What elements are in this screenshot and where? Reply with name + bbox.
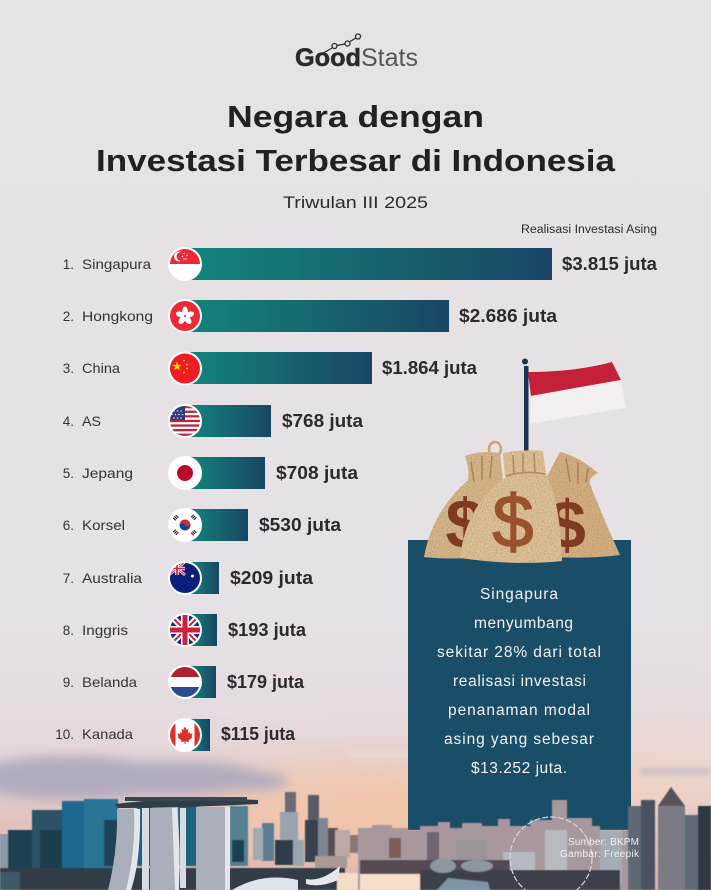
left towers: [0, 787, 711, 890]
ArtScience dome: [232, 878, 298, 890]
source credit: [560, 837, 640, 860]
right bag: $: [548, 487, 586, 563]
flag: China: [168, 352, 202, 386]
flag: Belanda: [168, 665, 202, 699]
values: $1.864 juta: [382, 358, 478, 378]
values: $209 juta: [230, 568, 314, 588]
country names: Inggris: [82, 622, 128, 638]
source credit: Gambar: Freepik: [560, 849, 640, 860]
flag: Singapura: [168, 247, 202, 281]
country names: Belanda: [82, 674, 137, 690]
source credit: Sumber: BKPM: [568, 837, 639, 848]
values: $530 juta: [259, 515, 342, 535]
country names: Korsel: [82, 517, 125, 533]
left bag: [424, 442, 503, 563]
icon: money bags: [424, 442, 620, 563]
bay and ground: [0, 868, 345, 890]
callout text: penanaman modal: [448, 702, 590, 719]
country names: Australia: [82, 570, 142, 586]
flag: Inggris: [168, 613, 202, 647]
callout text: sekitar 28% dari total: [437, 644, 601, 661]
rank numbers: 6.: [63, 518, 74, 533]
rank numbers: 2.: [63, 309, 74, 324]
rank numbers: 7.: [63, 571, 74, 586]
column caption: Realisasi Investasi Asing: [521, 224, 657, 236]
values: $193 juta: [228, 620, 307, 640]
cloud bank: [0, 756, 287, 800]
rank numbers: 10.: [55, 727, 74, 742]
values: $708 juta: [276, 463, 359, 483]
midtown towers: [285, 792, 296, 822]
logo: GoodStats: [295, 34, 418, 72]
title: Investasi Terbesar di Indonesia: [96, 143, 616, 178]
left bag: $: [446, 485, 484, 563]
rank numbers: 8.: [63, 623, 74, 638]
subtitle: Triwulan III 2025: [283, 194, 428, 212]
skyline photo: [0, 787, 711, 890]
callout text: Singapura: [480, 586, 558, 603]
values: [221, 254, 658, 744]
logo: GoodStats: Stats: [361, 44, 418, 72]
title: [96, 99, 616, 178]
distant cloud streaks: [350, 752, 711, 775]
rank numbers: 4.: [63, 414, 74, 429]
hazy city behind callout: [358, 800, 631, 890]
values: $768 juta: [282, 411, 364, 431]
values: $2.686 juta: [459, 306, 558, 326]
country names: [82, 256, 153, 742]
country names: Hongkong: [82, 308, 153, 324]
middle bag: $: [492, 480, 534, 563]
callout text: asing yang sebesar: [444, 731, 594, 748]
icon: Indonesian flag: [522, 358, 626, 454]
flag: Hongkong: [168, 299, 202, 333]
country names: Singapura: [82, 256, 151, 272]
flag: AS: [168, 404, 202, 438]
rank numbers: 5.: [63, 466, 74, 481]
logo: GoodStats: Good: [295, 44, 361, 72]
bar chart: [55, 247, 658, 752]
values: $179 juta: [227, 672, 305, 692]
flag: Kanada: [168, 718, 202, 752]
country names: Jepang: [82, 465, 133, 481]
flag: Korsel: [168, 508, 202, 542]
flag: Australia: [168, 561, 202, 595]
panel: callout: [408, 540, 631, 830]
rank numbers: [55, 257, 74, 742]
values: $115 juta: [221, 724, 296, 744]
Singapore Flyer: [510, 817, 592, 890]
middle bag: [460, 450, 562, 563]
gardens domes: [430, 859, 456, 873]
values: $3.815 juta: [562, 254, 658, 274]
rank numbers: 9.: [63, 675, 74, 690]
Marina Bay Sands: [108, 797, 340, 890]
warm sunset glow: [190, 735, 711, 855]
far right towers: [628, 806, 646, 890]
icon: trend line: [320, 34, 360, 55]
country names: Kanada: [82, 726, 133, 742]
country names: China: [82, 360, 120, 376]
flag: Jepang: [168, 456, 202, 490]
callout text: $13.252 juta.: [471, 760, 567, 777]
callout text: menyumbang: [474, 615, 573, 632]
title: Negara dengan: [227, 99, 484, 134]
callout text: [437, 586, 601, 777]
rank numbers: 1.: [63, 257, 74, 272]
bars: [190, 248, 552, 751]
rank numbers: 3.: [63, 361, 74, 376]
callout text: realisasi investasi: [453, 673, 586, 690]
right bag: [545, 452, 620, 563]
country names: AS: [82, 413, 101, 429]
